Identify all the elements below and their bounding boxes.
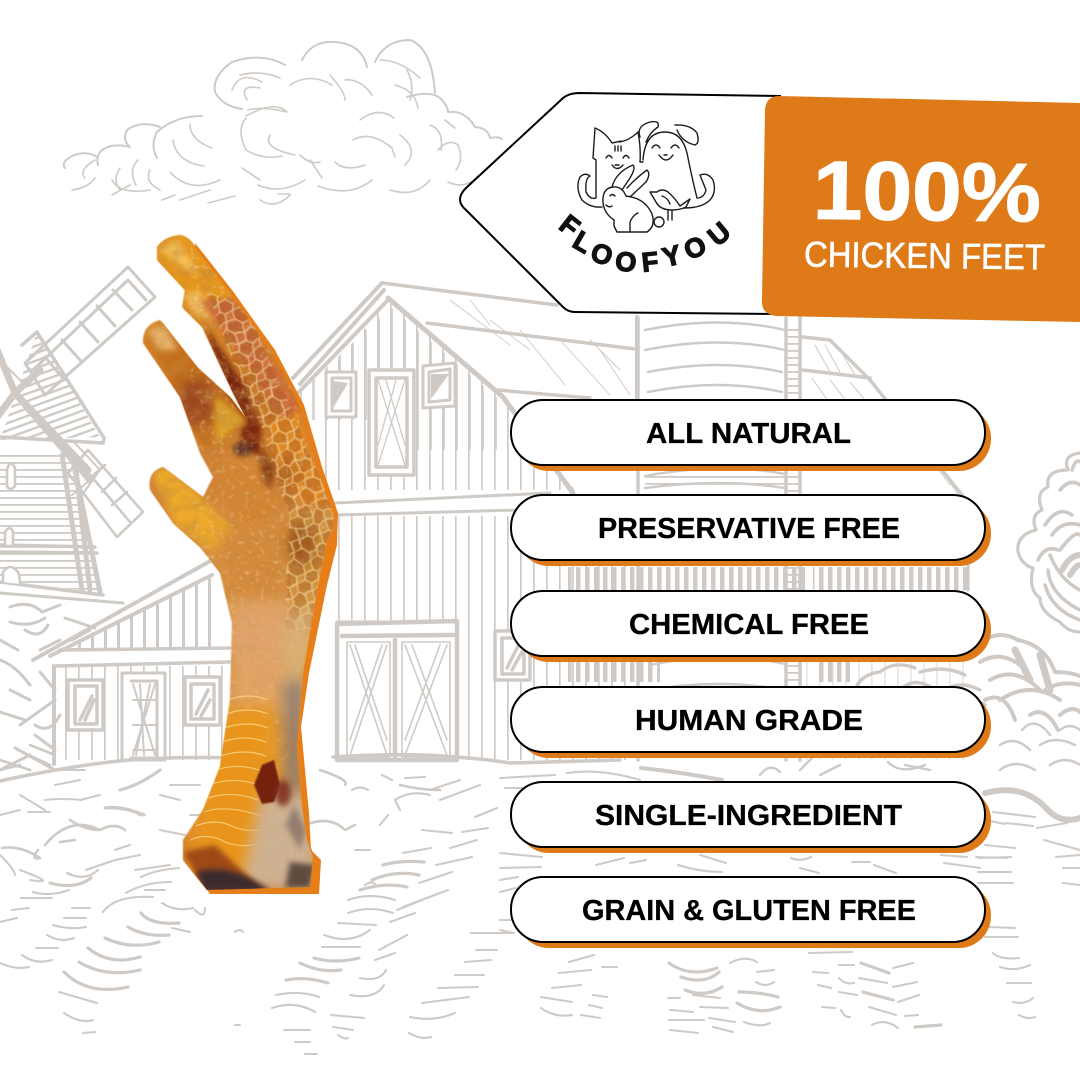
foot silhouette xyxy=(143,235,334,890)
illustration: ground ridge line xyxy=(0,745,1080,820)
illustration: right shed xyxy=(803,337,982,760)
foot colour and scale detail xyxy=(145,235,334,890)
benefit pill: human grade xyxy=(511,687,991,758)
benefit pill: all natural xyxy=(511,400,991,471)
benefit pill: preservative free xyxy=(511,495,991,566)
dog xyxy=(639,122,714,208)
banner headline: 100% xyxy=(812,144,1042,239)
benefit pill: chemical free xyxy=(511,591,991,662)
logo wordmark xyxy=(554,209,736,278)
logo wordmark: F xyxy=(554,209,585,243)
logo wordmark: O xyxy=(679,230,711,266)
benefit pill: human grade: HUMAN GRADE xyxy=(635,705,863,737)
logo wordmark: Y xyxy=(659,240,684,273)
product: chicken foot photo xyxy=(140,230,340,930)
brand tag xyxy=(460,93,780,314)
illustration: small barn xyxy=(33,560,232,764)
illustration: hillside behind small barn xyxy=(0,593,123,770)
illustration: silo xyxy=(638,316,805,760)
tag shape xyxy=(460,93,780,314)
banner subheading: CHICKEN FEET xyxy=(804,234,1045,277)
illustration: tree on right edge xyxy=(1018,453,1080,632)
bird xyxy=(650,190,690,220)
illustration: main barn xyxy=(293,283,640,760)
orange banner xyxy=(762,96,1080,322)
benefit pill: grain and gluten free: GRAIN & GLUTEN FREE xyxy=(582,895,916,927)
orange shadow behind foot xyxy=(145,237,338,894)
logo wordmark: F xyxy=(640,246,660,278)
cat xyxy=(578,128,643,207)
benefit pill: chemical free: CHEMICAL FREE xyxy=(629,609,869,641)
logo wordmark: L xyxy=(568,225,597,259)
illustration: windmill xyxy=(0,267,155,595)
benefit pill: all natural: ALL NATURAL xyxy=(646,418,851,450)
leg scale ridges xyxy=(190,696,268,846)
rabbit xyxy=(603,165,653,232)
illustration: ploughed field strokes, thick xyxy=(2,770,941,1027)
illustration: cloud xyxy=(64,40,502,204)
illustration: bushes on right xyxy=(760,635,1080,775)
logo: FloofYou animals xyxy=(578,122,714,232)
benefit pill: single-ingredient xyxy=(511,782,991,853)
logo wordmark: O xyxy=(587,237,616,272)
benefit pill: preservative free: PRESERVATIVE FREE xyxy=(598,513,900,545)
logo wordmark: O xyxy=(614,246,638,278)
illustration: ploughed field strokes, thin xyxy=(0,770,1080,1054)
benefit pill: grain and gluten free xyxy=(511,877,991,948)
benefit pill: single-ingredient: SINGLE-INGREDIENT xyxy=(595,800,902,832)
logo wordmark: U xyxy=(702,216,736,252)
